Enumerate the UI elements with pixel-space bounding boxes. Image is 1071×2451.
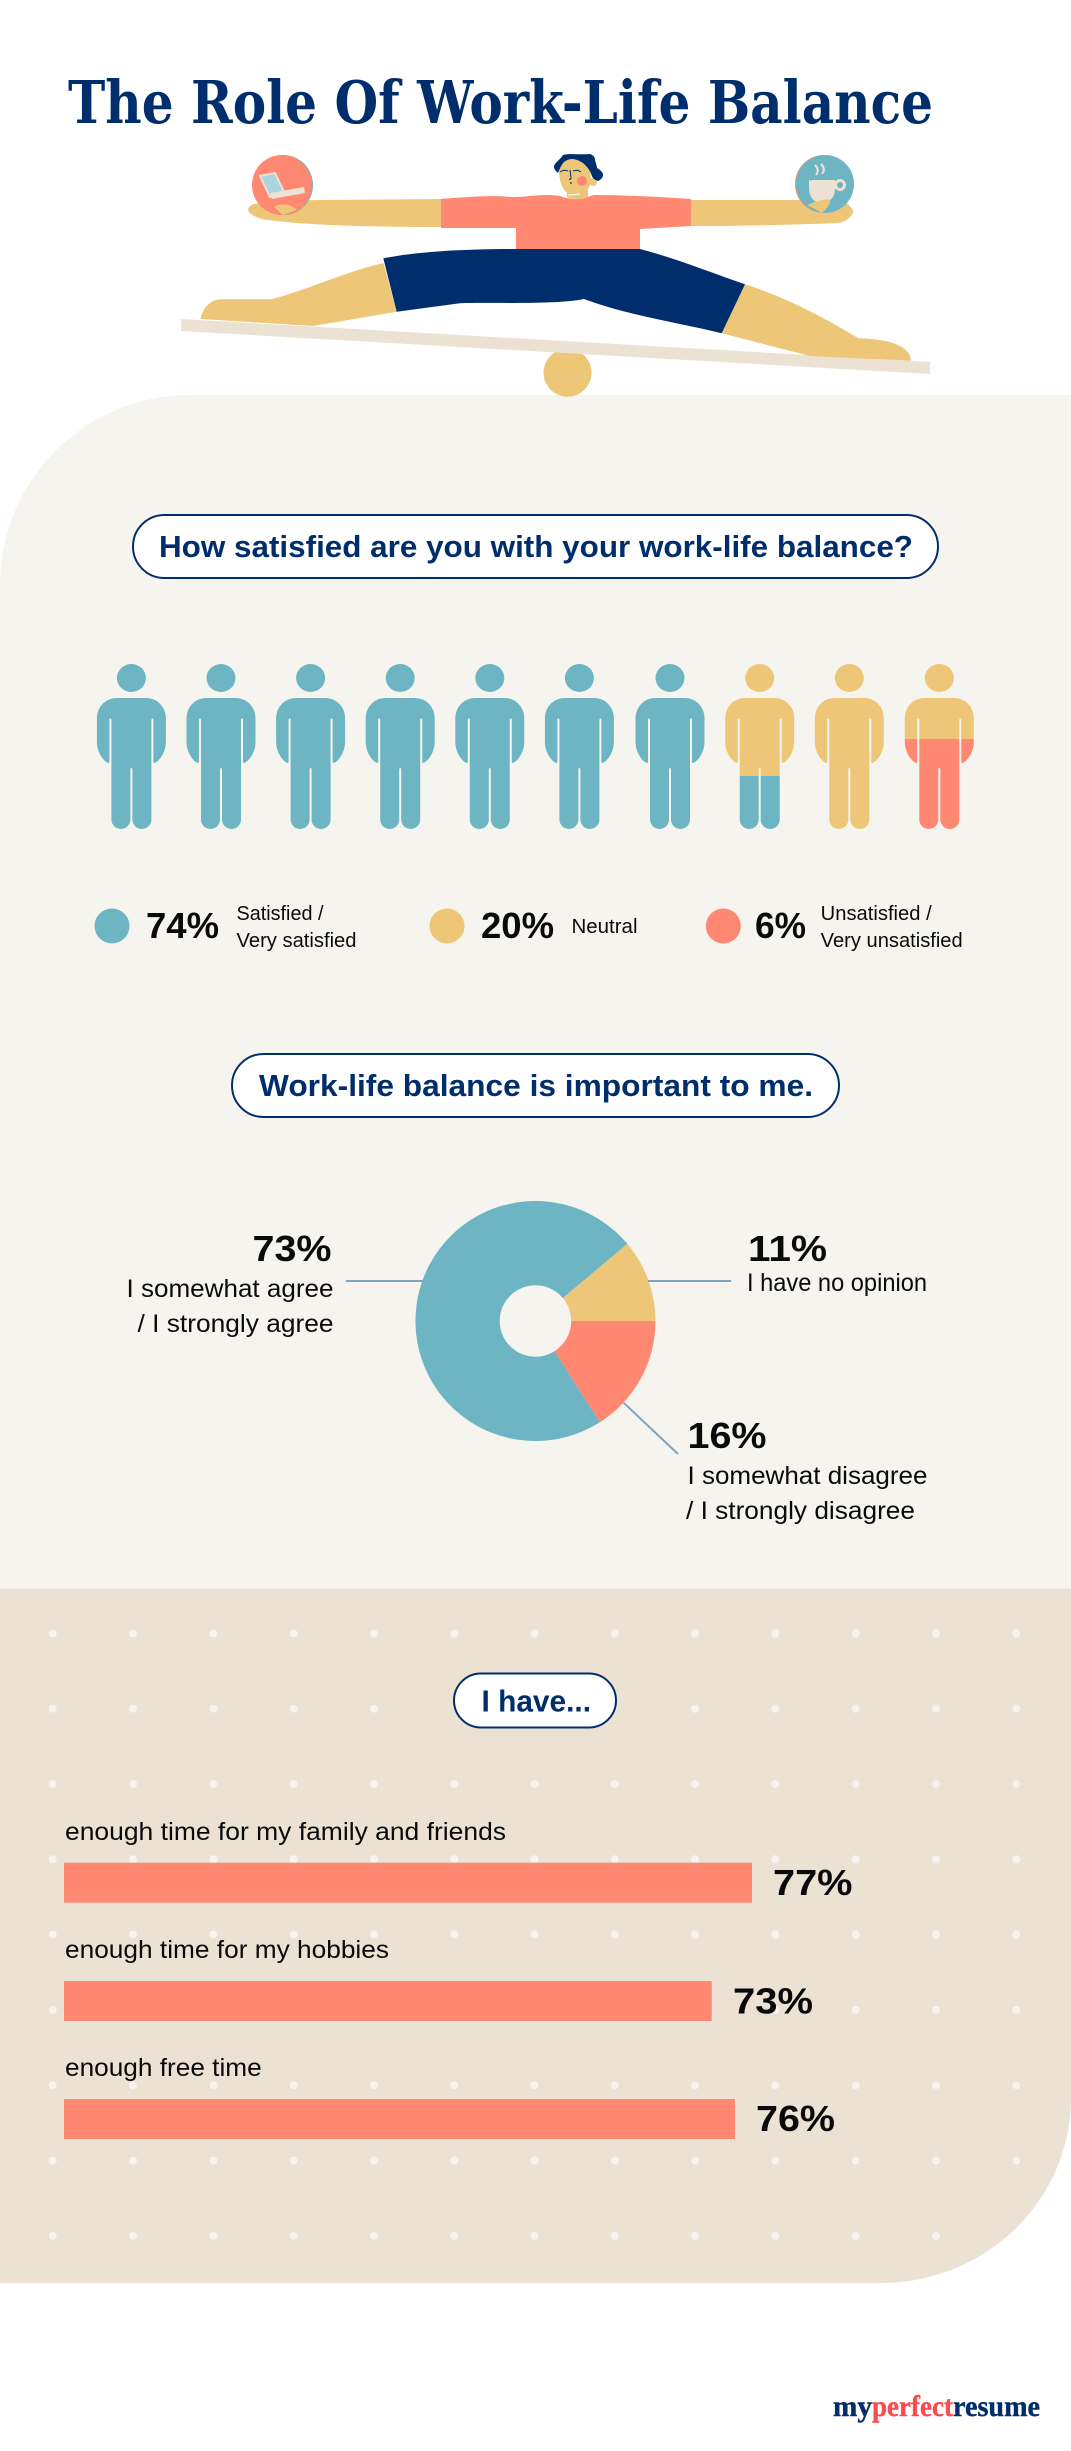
left arm — [248, 199, 441, 227]
heading: I have — [454, 1674, 616, 1728]
heading: I have: I have... — [482, 1684, 591, 1718]
heading: how satisfied: How satisfied are you with your work-life balance? — [159, 529, 913, 564]
legend: unsatisfied: Very unsatisfied — [821, 930, 963, 952]
legend: satisfied: Satisfied / — [236, 903, 324, 925]
bar: free time 76 percent — [64, 2054, 835, 2139]
plank — [181, 319, 930, 374]
bar: free time 76 percent: enough free time — [65, 2054, 262, 2082]
fulcrum — [544, 349, 592, 397]
title: The Role Of Work-Life Balance — [68, 68, 933, 137]
callout: 16 percent: 16% — [688, 1415, 766, 1456]
legend: satisfied — [94, 903, 356, 952]
legend: neutral: 20% — [481, 905, 554, 946]
logo: my — [833, 2390, 872, 2423]
illustration: person balancing on seesaw — [181, 154, 930, 397]
right arm — [691, 200, 853, 226]
legend: neutral: Neutral — [572, 916, 638, 938]
panel: I have — [0, 1588, 1071, 2283]
pictogram: ten people — [97, 664, 974, 829]
bar: family and friends 77 percent — [64, 1818, 852, 1903]
right leg — [722, 284, 911, 361]
callout: 73 percent: 73% — [252, 1228, 332, 1269]
bar: hobbies 73 percent: 73% — [733, 1980, 813, 2022]
donut chart — [415, 1201, 656, 1441]
shorts — [383, 249, 745, 333]
heading: important to me: Work-life balance is important to me. — [259, 1068, 813, 1103]
callout: 73 percent: / I strongly agree — [138, 1310, 334, 1338]
legend: satisfied: Very satisfied — [236, 930, 356, 952]
legend: neutral — [430, 905, 638, 946]
heading: important to me — [232, 1054, 839, 1117]
callout: 11 percent — [648, 1228, 927, 1297]
bar: family and friends 77 percent: enough time for my family and friends — [65, 1818, 506, 1846]
left leg — [201, 263, 397, 326]
legend: unsatisfied — [706, 903, 963, 952]
legend: satisfied: 74% — [146, 905, 219, 946]
callout: 16 percent: I somewhat disagree — [688, 1462, 928, 1490]
bar: family and friends 77 percent: 77% — [773, 1862, 852, 1903]
callout: 11 percent: 11% — [748, 1228, 827, 1269]
callout: 73 percent: I somewhat agree — [126, 1275, 334, 1303]
logo: perfect — [872, 2390, 953, 2423]
callout: 11 percent: I have no opinion — [747, 1269, 927, 1297]
panel: satisfaction and importance — [0, 395, 1071, 1588]
icon: life ball with coffee cup — [795, 155, 854, 213]
callout: 16 percent: / I strongly disagree — [686, 1497, 915, 1525]
icon: work ball with laptop — [252, 155, 313, 215]
heading: how satisfied — [133, 515, 938, 578]
callout: 73 percent — [126, 1228, 423, 1338]
logo: resume — [953, 2390, 1040, 2423]
legend: unsatisfied: Unsatisfied / — [821, 903, 932, 925]
bar: hobbies 73 percent: enough time for my hobbies — [65, 1936, 389, 1964]
legend: unsatisfied: 6% — [755, 905, 806, 946]
callout: 16 percent — [624, 1403, 928, 1525]
bar: hobbies 73 percent — [64, 1936, 813, 2022]
bar: free time 76 percent: 76% — [756, 2098, 835, 2139]
head — [554, 154, 603, 199]
shirt — [441, 195, 691, 249]
